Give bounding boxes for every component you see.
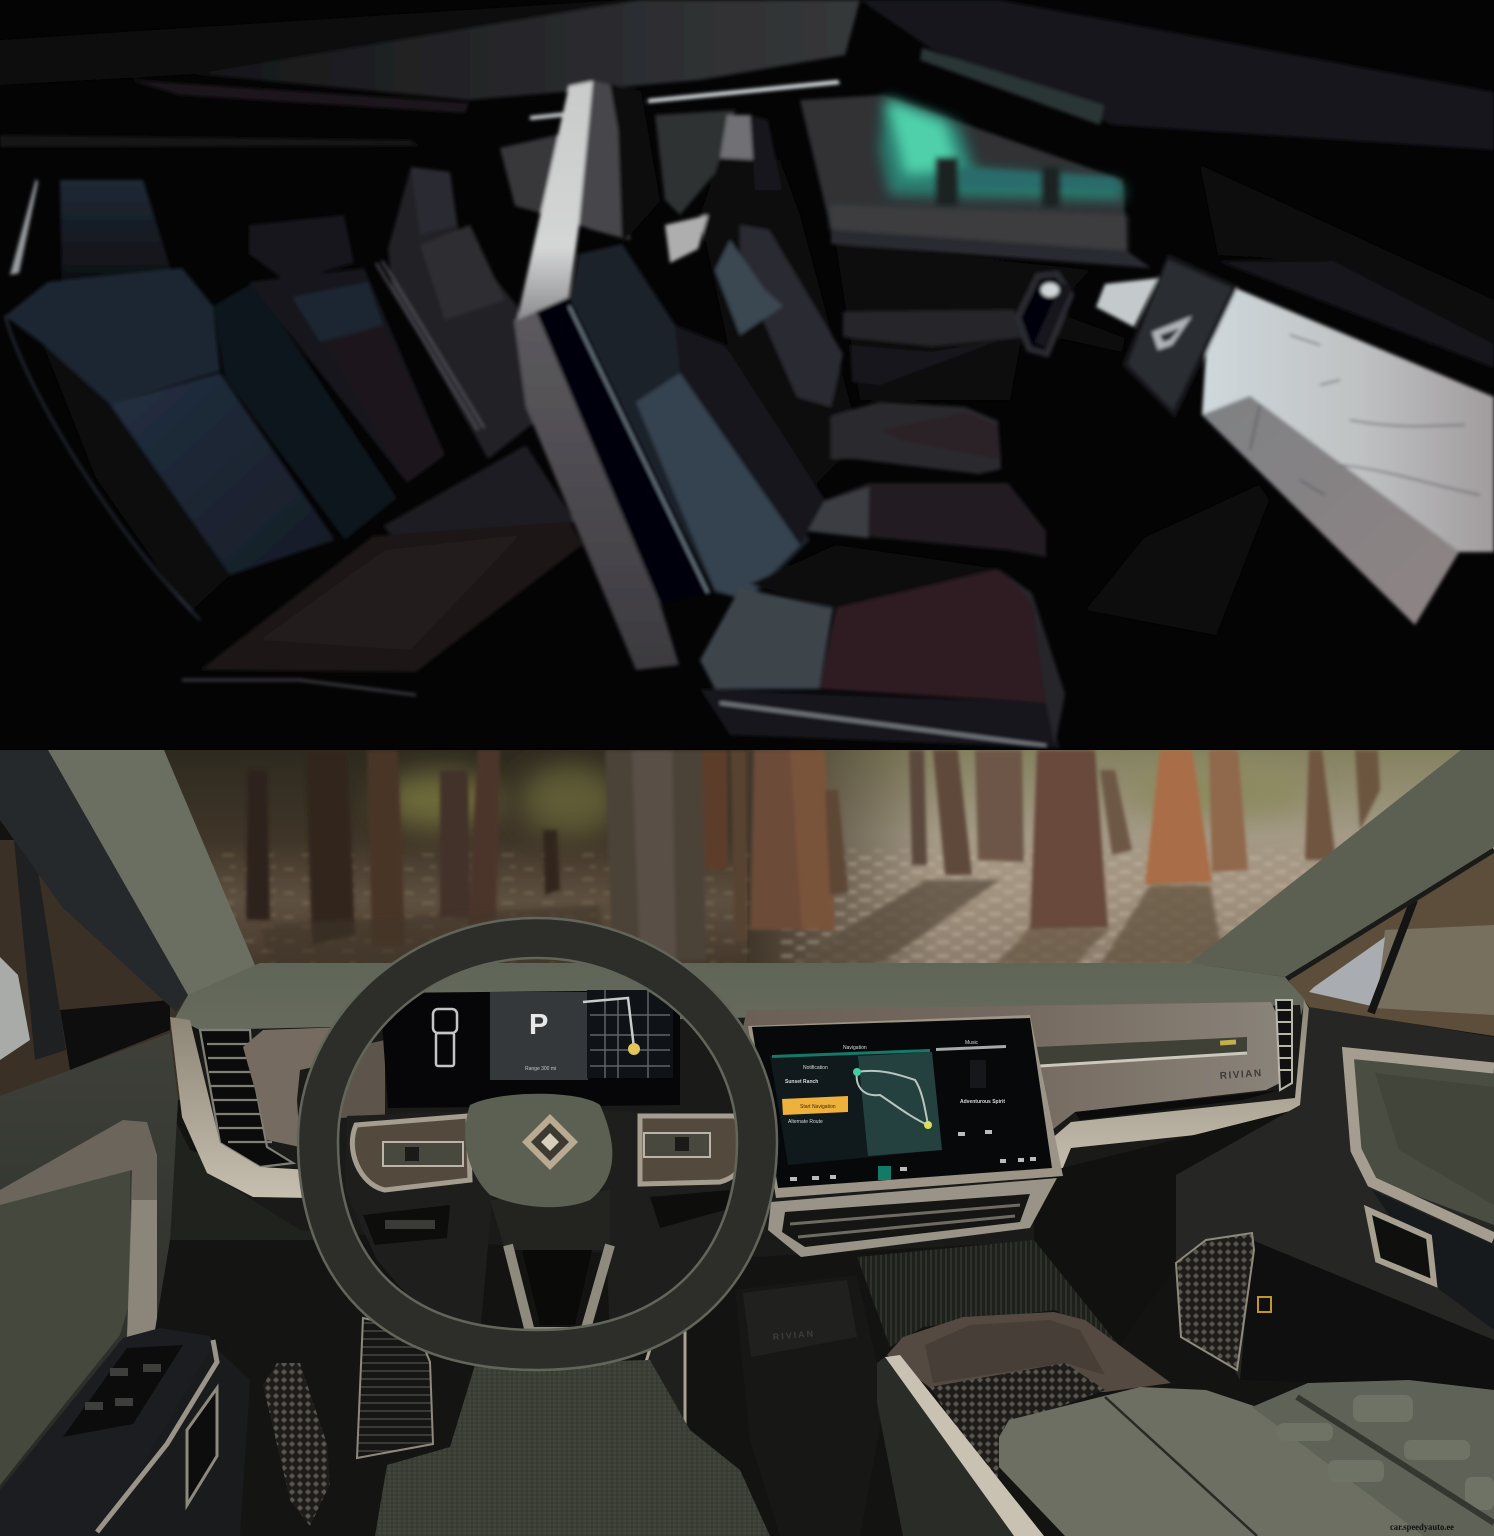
left spoke wood and buttons: [352, 1116, 470, 1190]
left rear seat: [5, 179, 397, 620]
middle rear seat: [249, 215, 445, 483]
photo: Rivian interior: [0, 750, 1494, 1536]
tunnel carpet: [857, 1240, 1120, 1347]
left lower panel: [170, 1124, 314, 1240]
left door: [0, 1033, 200, 1536]
screen labels: Adventurous Spirit: [960, 1099, 1005, 1105]
armrest: [999, 1387, 1424, 1536]
center console tray: [877, 1312, 1171, 1536]
right silver trim: [1050, 1000, 1314, 1175]
left silver trim: [170, 1017, 310, 1198]
right side window: [1288, 850, 1494, 1036]
right wood panel: [740, 1002, 1280, 1130]
dash logo text: RIVIAN: [1219, 1068, 1263, 1082]
left pedal: [357, 1318, 433, 1458]
forest background: [160, 750, 1494, 965]
roof beams: [0, 0, 640, 147]
icon: Rivian compass badge: [522, 1114, 578, 1170]
nav map: [583, 990, 670, 1078]
left A pillar: [48, 750, 260, 995]
tunnel panel with logo: RIVIAN: [772, 1328, 816, 1342]
ground shadows: [260, 880, 1225, 965]
screen labels: Music: [965, 1040, 979, 1046]
left door speaker: [263, 1363, 330, 1526]
right door: [1176, 1007, 1494, 1395]
map route: [857, 1071, 928, 1125]
left air vent: [200, 1030, 293, 1167]
right rear seat: [376, 167, 536, 459]
dashboard recess: [247, 1005, 1301, 1030]
far background behind front seat: [655, 110, 735, 215]
left pillar dark band: [0, 750, 188, 1012]
right spoke wood and buttons: [640, 1116, 746, 1184]
lower dash support: [1086, 485, 1269, 635]
tunnel panel with logo: [735, 1275, 885, 1536]
roof light bars: [530, 80, 840, 120]
photo: Cybertruck interior: [0, 0, 1494, 749]
screen labels: Notification: [803, 1065, 828, 1071]
near front seat cushion: [700, 545, 1065, 748]
left window frame strip: [14, 840, 66, 1060]
rear cushion: [182, 445, 582, 695]
left floor mat: [375, 1360, 770, 1536]
right door speaker: [1176, 1233, 1254, 1370]
rear side window: [500, 132, 570, 215]
dark lower dash right: [1034, 1105, 1330, 1345]
screen labels: Alternate Route: [788, 1119, 823, 1125]
center display: [748, 1015, 1063, 1198]
screen labels: Navigation: [843, 1045, 867, 1051]
footwell wall: [155, 1240, 500, 1536]
door panel: [836, 244, 1090, 400]
steering wheel spokes: [345, 1110, 746, 1335]
door clasp: [1258, 1297, 1271, 1312]
screen labels: [785, 1040, 1005, 1125]
brake pedal: [645, 1285, 685, 1430]
steering wheel: [1018, 274, 1125, 354]
far front seat: [665, 115, 1046, 557]
window sill: [831, 230, 1151, 268]
wood behind display: [340, 1040, 385, 1118]
screen labels: Start Navigation: [800, 1104, 836, 1110]
left wood panel: [243, 1028, 330, 1146]
near front seat backrest: [514, 81, 825, 670]
gear indicator: P: [529, 1009, 548, 1041]
steering wheel hub: [465, 1094, 612, 1207]
left armrest with switches: [0, 1328, 250, 1536]
cabin scene group: [0, 0, 1494, 748]
upper windshield band: [860, 0, 1494, 368]
marble dash: [1096, 278, 1494, 625]
truck icon: [433, 1009, 457, 1066]
left window area: [0, 840, 190, 1100]
roof glass panel: [196, 0, 860, 100]
tree trunks: [246, 750, 1380, 960]
front window with green glow: [800, 95, 1127, 251]
steering wheel rim: [298, 918, 777, 1370]
lower center vent: [768, 1178, 1057, 1257]
rear seats: [5, 167, 582, 695]
right A pillar: [1190, 750, 1494, 980]
door wood trim: [0, 1120, 157, 1338]
passenger seat: [1252, 1380, 1494, 1536]
touchscreen: [1122, 254, 1238, 418]
driver display: Range 300 mi: [525, 1066, 556, 1072]
driver display: [380, 990, 680, 1108]
door pocket: [1240, 1240, 1494, 1395]
watermark: car.speedyauto.ee: [1390, 1522, 1454, 1532]
right air vent: [1276, 1000, 1292, 1090]
screen labels: Sunset Ranch: [785, 1079, 818, 1085]
dashboard top: [175, 963, 1305, 1030]
